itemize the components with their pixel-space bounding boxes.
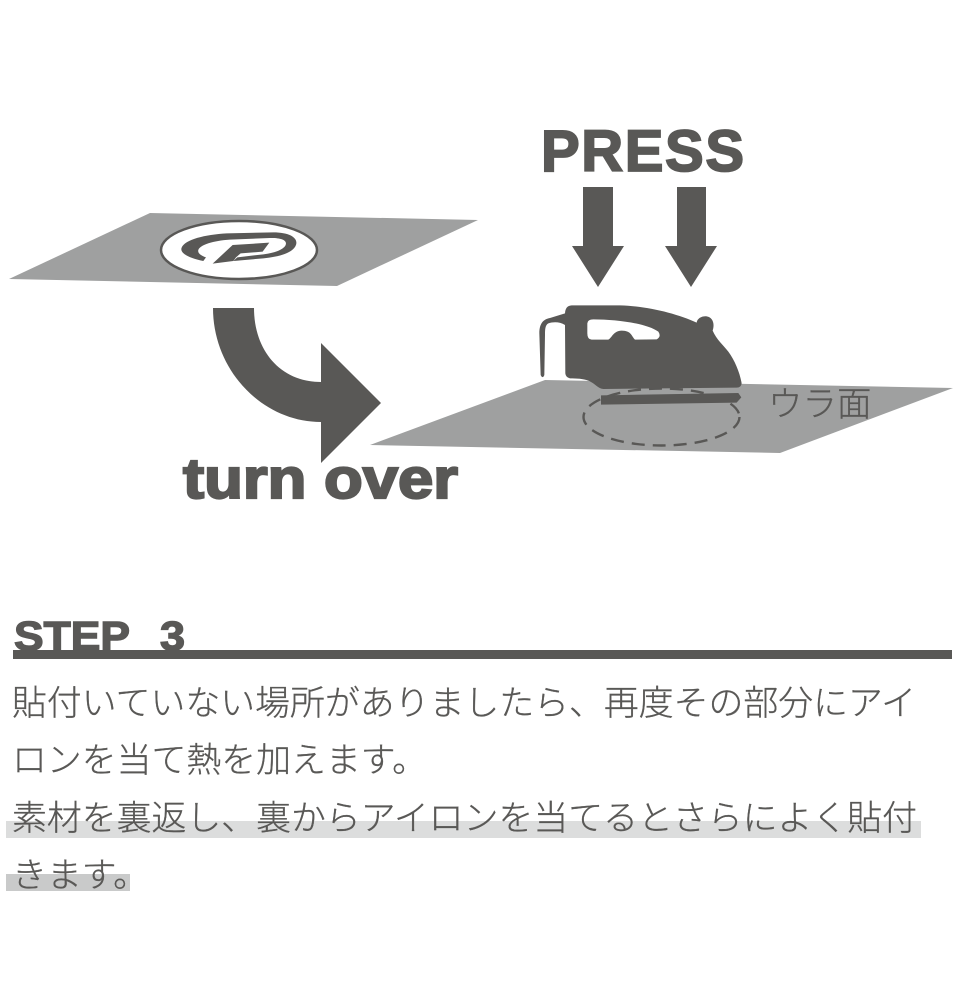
highlight: line 3 [6, 821, 921, 838]
material sheet, back [370, 380, 953, 453]
panel: front of material with logo [9, 213, 478, 286]
panel: back of material with iron [370, 305, 953, 453]
icon: iron [539, 305, 742, 405]
highlight: line 4 [6, 874, 130, 891]
label: turn over: turn over [183, 447, 458, 511]
heading: STEP 3: 3 [160, 613, 185, 659]
arrow: turn over [213, 308, 381, 463]
logo badge [161, 221, 317, 279]
heading: STEP 3 [13, 613, 952, 659]
arrow: press right [665, 187, 717, 287]
material sheet, front [9, 213, 478, 286]
body text: きます。 [12, 856, 148, 895]
arrow: press left [572, 187, 624, 287]
label: back side: ウラ面 [768, 386, 872, 424]
dashed press area [584, 388, 740, 446]
body text [12, 684, 917, 895]
body text: 素材を裏返し、裏からアイロンを当てるとさらによく貼付 [12, 799, 917, 838]
heading: STEP 3: STEP [14, 613, 130, 659]
body text: 貼付いていない場所がありましたら、再度その部分にアイ [12, 684, 916, 723]
body text: ロンを当て熱を加えます。 [12, 741, 427, 780]
label: PRESS: PRESS [541, 119, 744, 184]
